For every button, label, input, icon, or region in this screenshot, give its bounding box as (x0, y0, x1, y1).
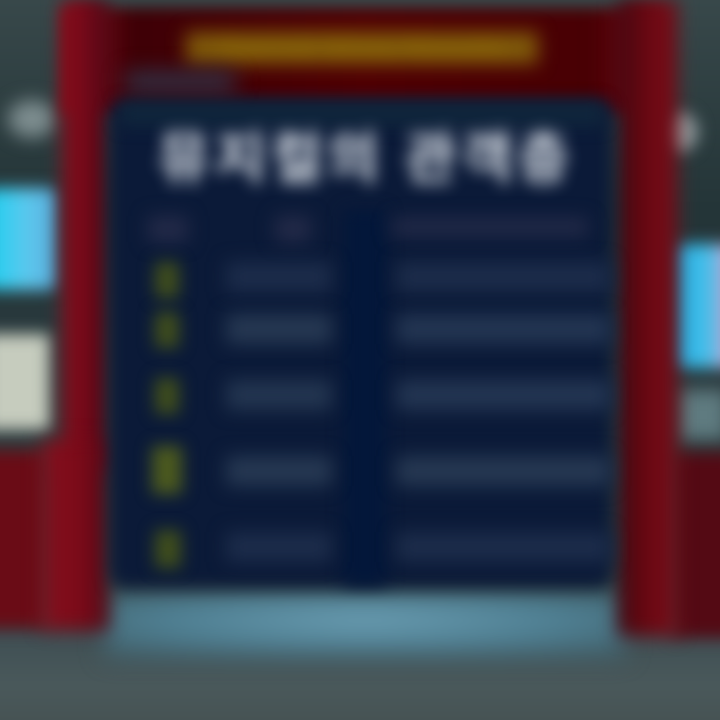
row 2 (148, 306, 616, 355)
board center divider (344, 210, 386, 585)
board header shade (120, 102, 604, 126)
curtain frame top (62, 8, 662, 114)
row 3 name (226, 380, 332, 410)
row 3 detail (396, 380, 610, 410)
left pale poster (0, 334, 50, 430)
right curtain (618, 0, 678, 636)
row 5 name (226, 532, 332, 562)
row 4 (144, 438, 616, 502)
row 5 detail (396, 532, 610, 562)
yellow banner heading: Special Show Results (217, 32, 507, 63)
row 2 rank: 2 (155, 312, 164, 329)
row 4 rank: 4 (152, 446, 161, 463)
lower left curtain (0, 450, 46, 628)
row 3 name: — (226, 380, 242, 397)
row 1 name (226, 262, 332, 292)
row 2 name: — (226, 314, 242, 331)
lower right curtain (672, 452, 720, 638)
board top tint (125, 72, 235, 92)
floor (0, 625, 720, 720)
header: name: 이름 (275, 222, 304, 239)
left curtain (62, 0, 108, 470)
row 2 name (226, 314, 332, 344)
row 3 (148, 371, 616, 421)
row 5 (148, 523, 611, 575)
row 5 detail: — (396, 532, 412, 549)
navy board panel (110, 100, 612, 588)
left wall lamp (8, 100, 56, 138)
row 1 name: — (226, 262, 242, 279)
left blue screen (0, 188, 58, 290)
right blue screen (672, 244, 720, 368)
table header labels (146, 213, 588, 246)
row 1 detail (396, 262, 610, 292)
row 5 name: — (226, 532, 242, 549)
row 1 (148, 255, 612, 304)
row 4 name (226, 456, 332, 486)
left curtain skirt (42, 440, 108, 630)
row 3 rank (155, 378, 179, 414)
row 2 rank (155, 312, 179, 348)
row 3 rank: 3 (155, 378, 164, 395)
right wall lamp (660, 112, 698, 152)
row 1 rank: 1 (155, 262, 164, 279)
header: detail (392, 218, 588, 236)
stage light on floor (105, 590, 625, 656)
header: rank: 순위 (148, 222, 177, 239)
row 4 detail: — (396, 456, 412, 473)
row 1 detail: — (396, 262, 412, 279)
row 4 rank (152, 446, 182, 494)
board title: 뮤지컬의 관객층 (158, 127, 574, 190)
row 3 detail: — (396, 380, 412, 397)
row 4 detail (396, 456, 610, 486)
header: rank (148, 216, 188, 242)
row 2 detail: — (396, 314, 412, 331)
row 5 rank: 5 (155, 530, 164, 547)
row 5 rank (155, 530, 181, 568)
row 1 rank (155, 262, 179, 298)
right pale poster (676, 390, 720, 440)
row 4 name: — (226, 456, 242, 473)
header: name (275, 216, 311, 242)
row 2 detail (396, 314, 610, 344)
